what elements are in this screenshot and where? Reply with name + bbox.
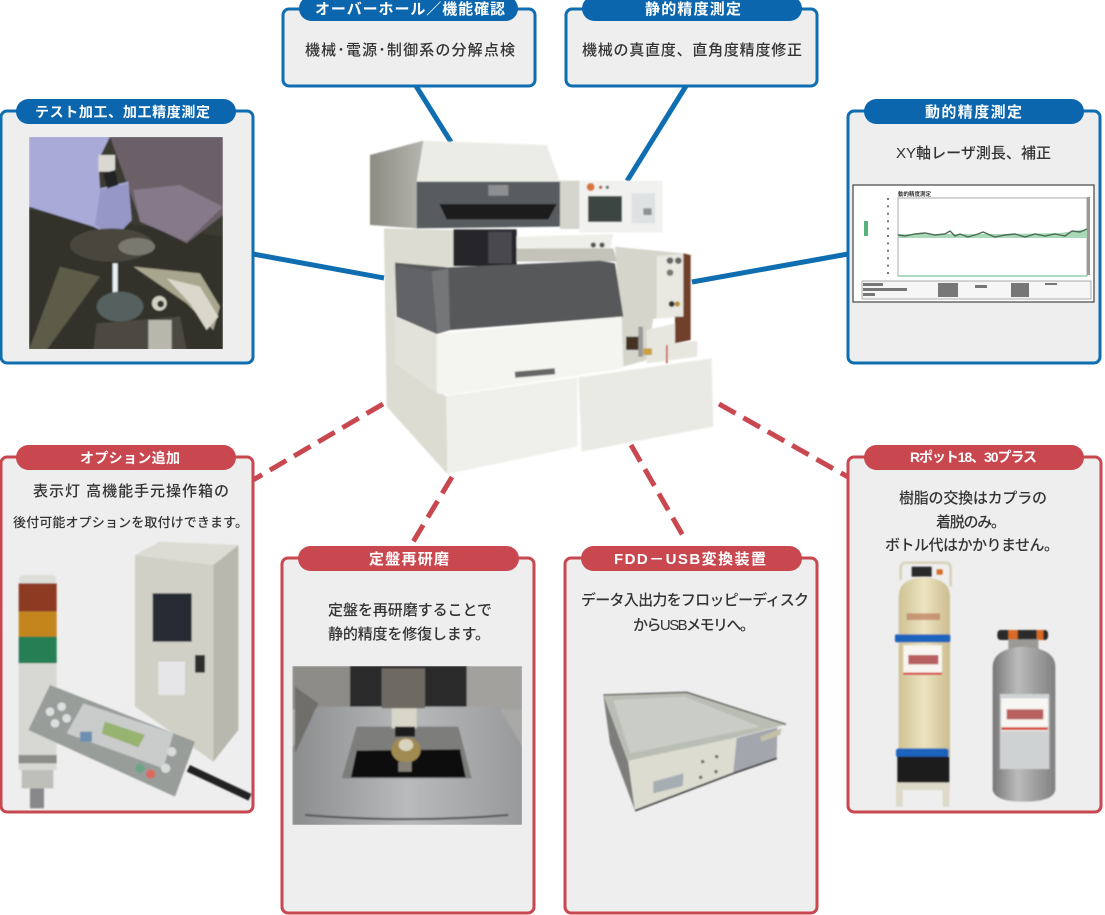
text: FDD description: データ入出力をフロッピーディスク (581, 591, 809, 609)
lower front cabinet (446, 377, 577, 474)
heading: FDD to USB converter (581, 546, 802, 571)
dark tank (395, 261, 623, 334)
lower right cabinet (578, 358, 713, 452)
panel: test machining (1, 99, 253, 363)
control panel (560, 181, 580, 229)
photo: signal tower, cabinet and pendant (19, 542, 250, 808)
panel: FDD to USB converter (565, 546, 817, 913)
heading: test machining: テスト加工、加工精度測定 (35, 104, 210, 120)
panel: overhaul (283, 0, 535, 86)
heading: dynamic accuracy: 動的精度測定 (925, 103, 1022, 121)
centre head (453, 229, 517, 266)
text: R-pot description: 樹脂の交換はカプラの (899, 489, 1047, 507)
central machine photo (370, 141, 713, 474)
connector lines: dashed red (253, 404, 848, 542)
heading: options: オプション追加 (80, 450, 180, 466)
panel: surface plate regrinding (282, 546, 534, 913)
text: R-pot description (885, 489, 1059, 554)
text: options description (13, 482, 248, 530)
plumbing (626, 337, 639, 350)
panel: options (1, 445, 253, 812)
heading: overhaul: オーバーホール／機能確認 (315, 0, 505, 18)
heading: R-pot (864, 445, 1084, 470)
text: options description: 表示灯 高機能手元操作箱の (33, 482, 229, 500)
text: surface plate description (328, 602, 492, 643)
top cover (370, 141, 560, 228)
chart: laser measurement graph (853, 185, 1094, 302)
heading: static accuracy (582, 0, 802, 21)
heading: surface plate regrinding (298, 546, 519, 571)
text: FDD description: からUSBメモリへ。 (633, 617, 755, 634)
text: FDD description (581, 591, 809, 634)
white tank (437, 317, 623, 395)
dark head band (417, 182, 560, 228)
chart: laser measurement graph: 動的精度測定 (898, 190, 932, 198)
text: options description: 後付可能オプションを取付けできます。 (13, 515, 248, 530)
text: surface plate description: 定盤を再研磨することで (328, 602, 492, 619)
photo: surface plate (293, 666, 522, 825)
heading: FDD to USB converter: FDD－USB変換装置 (614, 550, 766, 568)
connector lines: solid blue (253, 86, 848, 282)
heading: static accuracy: 静的精度測定 (645, 0, 741, 18)
right side unit (615, 247, 683, 367)
heading: test machining (16, 99, 236, 124)
text: static accuracy description: 機械の真直度、直角度精度修正 (582, 41, 802, 59)
panel: dynamic accuracy (848, 99, 1100, 363)
text: R-pot description: 着脱のみ。 (936, 514, 1006, 531)
panel: R-pot (848, 445, 1101, 812)
text: laser measurement: XY軸レーザ測長、補正 (896, 145, 1051, 162)
photo: resin bottles (895, 563, 1055, 807)
heading: R-pot: Rポット18、30プラス (910, 449, 1037, 465)
text: R-pot description: ボトル代はかかりません。 (885, 537, 1059, 554)
panel: static accuracy (566, 0, 817, 86)
text: surface plate description: 静的精度を修復します。 (328, 625, 490, 643)
column and left side (384, 228, 453, 474)
text: overhaul description: 機械･電源･制御系の分解点検 (305, 42, 515, 59)
heading: dynamic accuracy (864, 99, 1084, 124)
heading: surface plate regrinding: 定盤再研磨 (369, 550, 449, 568)
photo: test machining (29, 137, 223, 350)
heading: options (16, 445, 236, 470)
photo: converter device (603, 692, 786, 811)
